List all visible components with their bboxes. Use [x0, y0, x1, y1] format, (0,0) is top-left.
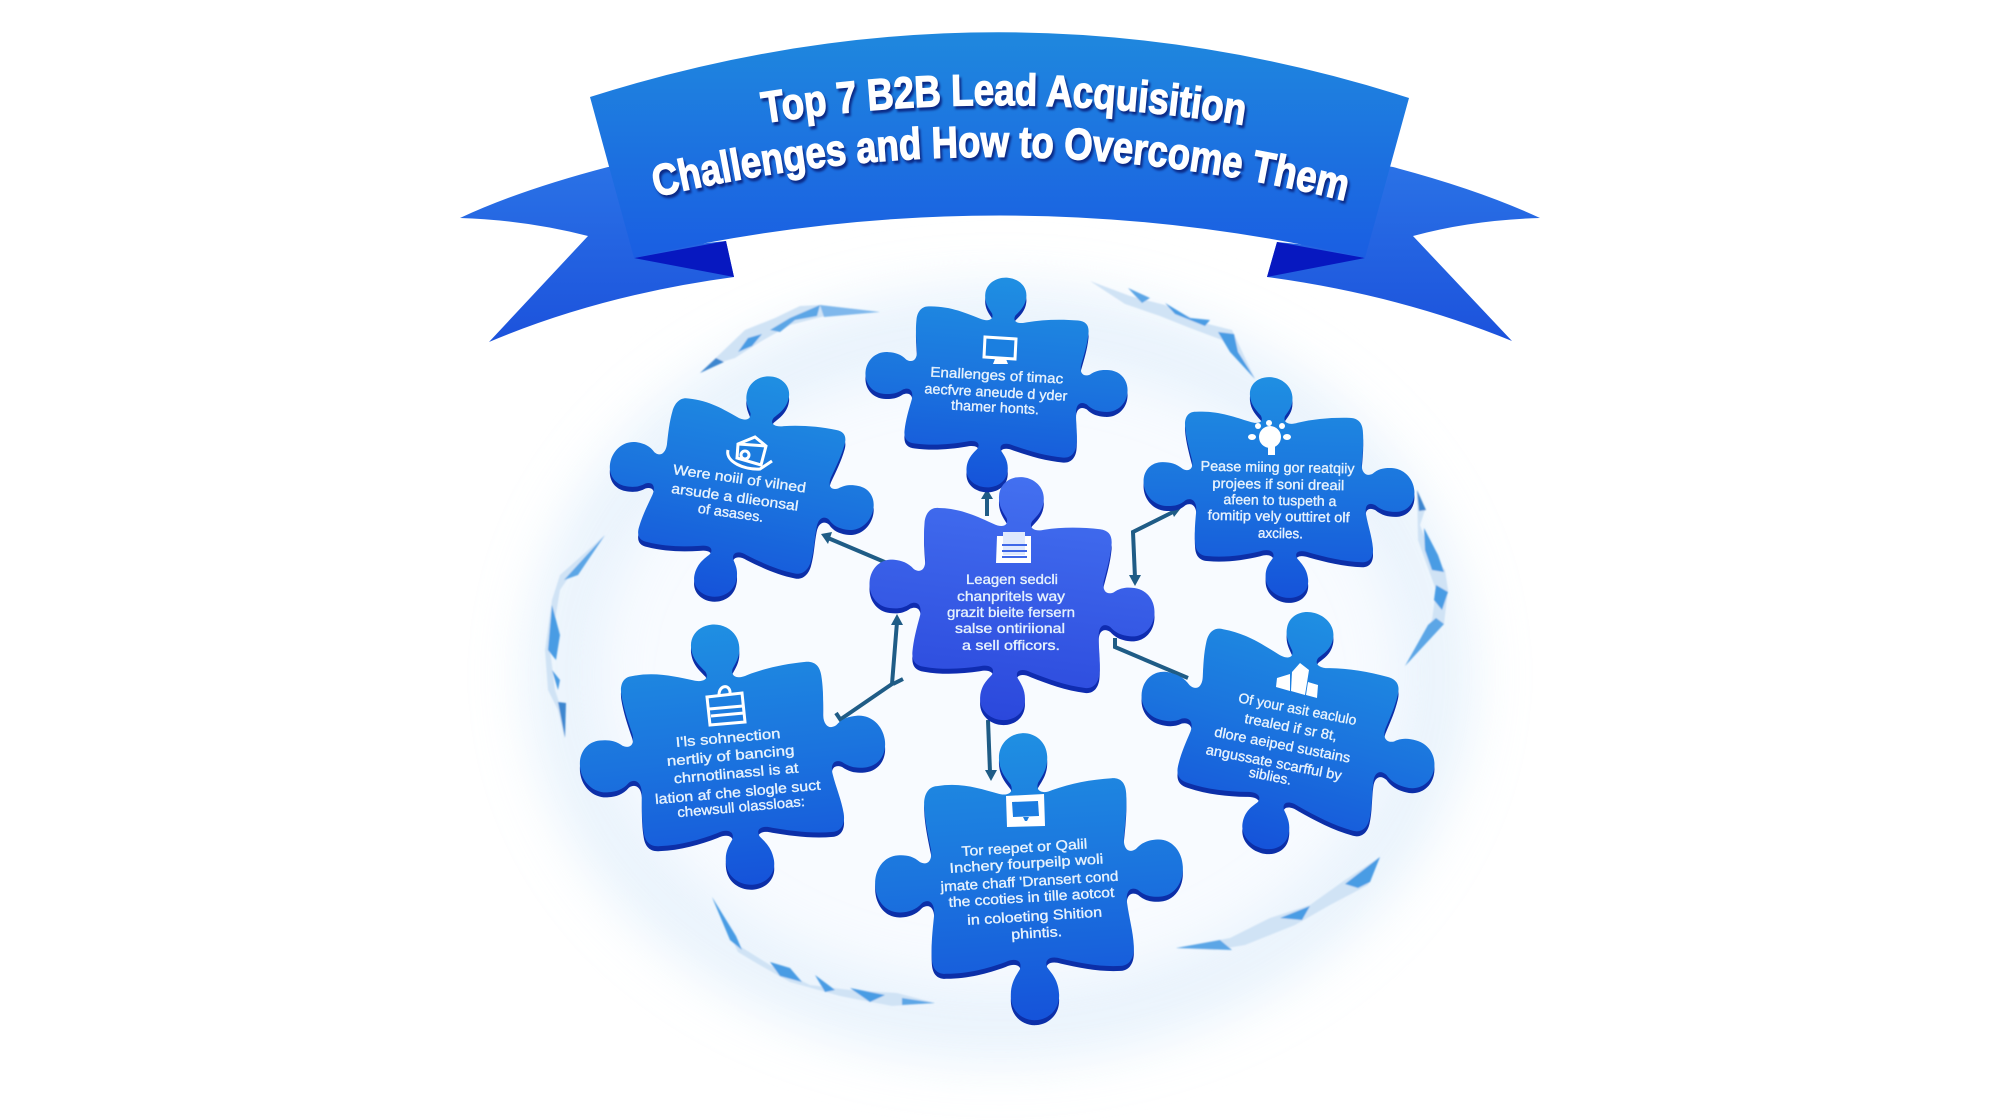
- text: upper right piece: Pease miing gor reatqiiy: [1200, 458, 1355, 476]
- icon: monitor: [984, 337, 1016, 364]
- text: bottom piece: phintis.: [1011, 923, 1063, 942]
- text: center piece: grazit bieite fersern: [947, 604, 1075, 620]
- arrow: center to bottom: [985, 720, 997, 781]
- icon: document stack: [996, 532, 1031, 563]
- text: center piece: chanpritels way: [957, 588, 1065, 604]
- background glow: [550, 290, 1450, 1050]
- puzzle piece: upper right: [1134, 374, 1424, 606]
- icon: clipboard: [707, 687, 745, 725]
- ribbon left fold: [634, 241, 734, 277]
- text: lower right piece: dlore aeiped sustains: [1213, 724, 1352, 766]
- icon: screen: [1006, 794, 1045, 827]
- swirl: lower right fragment: [1176, 857, 1380, 950]
- icon: box with swoosh: [728, 437, 772, 469]
- text: bottom piece: Inchery fourpeilp woli: [949, 850, 1104, 876]
- puzzle piece: lower right: [1115, 573, 1460, 893]
- swirl: lower left fragment: [712, 897, 935, 1006]
- text: top piece: thamer honts.: [951, 397, 1039, 417]
- puzzle piece: upper left: [579, 351, 904, 627]
- text: upper left piece: of asases.: [697, 500, 765, 525]
- text: lower right piece: siblies.: [1248, 764, 1293, 788]
- text: center piece: [947, 571, 1075, 653]
- arrow: center to lower left: [836, 614, 903, 722]
- swirl: right fragment: [1405, 490, 1448, 666]
- text: lower left piece: chrnotlinassl is at: [673, 759, 799, 786]
- text: lower left piece: lation af che slogle suct: [654, 777, 821, 807]
- text: upper right piece: afeen to tuspeth a: [1223, 491, 1337, 509]
- swirl: upper left fragment: [700, 305, 880, 373]
- puzzle piece: bottom: [868, 724, 1190, 1035]
- text: bottom piece: Tor reepet or Qalil: [961, 835, 1088, 859]
- text: lower right piece: trealed if sr 8t,: [1243, 710, 1339, 744]
- puzzle piece: top: [854, 267, 1139, 503]
- title second line: Challenges and How to Overcome Them: [652, 126, 1351, 205]
- text: upper left piece: arsude a dlieonsal: [671, 480, 800, 514]
- arrow: center to top: [981, 489, 993, 516]
- text: lower left piece: I'ls sohnection: [675, 725, 781, 750]
- text: upper right piece: fomitip vely outtiret olf: [1208, 507, 1350, 525]
- arrow: center to upper left: [821, 532, 887, 563]
- text: upper right piece: axciles.: [1258, 525, 1303, 541]
- text: top piece: aecfvre aneude d yder: [924, 380, 1068, 404]
- text: bottom piece: [937, 834, 1122, 946]
- title ribbon: [460, 32, 1540, 342]
- text: lower right piece: Of your asit eaclulo: [1237, 689, 1358, 728]
- title: Top 7 B2B Lead Acquisition: [759, 72, 1248, 131]
- icon: bar chart: [1276, 663, 1318, 698]
- text: bottom piece: jmate chaff 'Dransert cond: [939, 868, 1119, 895]
- text: bottom piece: the ccoties in tille aotcot: [948, 884, 1115, 910]
- swirl: left fragment: [545, 535, 605, 738]
- text: lower right piece: angussate scarfful by: [1205, 741, 1343, 783]
- ribbon right fold: [1267, 242, 1365, 277]
- text: upper right piece: [1199, 458, 1355, 542]
- text: bottom piece: in coloeting Shition: [967, 904, 1102, 928]
- swirl: upper right fragment: [1090, 281, 1255, 379]
- ribbon main band: [590, 32, 1409, 258]
- icon: light bulb: [1248, 420, 1291, 455]
- text: upper left piece: Were noiil of vilned: [672, 461, 807, 496]
- text: lower left piece: [650, 722, 823, 822]
- text: lower left piece: nertliy of bancing: [666, 742, 795, 769]
- puzzle piece: lower left: [559, 610, 906, 904]
- arrow: center to upper right: [1129, 507, 1181, 586]
- text: lower right piece: [1202, 685, 1359, 798]
- text: upper left piece: [667, 461, 807, 530]
- text: lower left piece: chewsull olassloas:: [677, 793, 805, 820]
- text: top piece: Enallenges of timac: [930, 364, 1064, 386]
- ribbon right tail: [1267, 165, 1540, 341]
- text: center piece: a sell officors.: [962, 637, 1060, 653]
- puzzle piece: center: [858, 460, 1166, 742]
- text: center piece: Leagen sedcli: [966, 571, 1058, 587]
- text: center piece: salse ontiriional: [955, 620, 1065, 636]
- text: upper right piece: projees if soni dreail: [1212, 475, 1344, 493]
- arrow: center to lower right: [1115, 638, 1188, 678]
- ribbon left tail: [460, 165, 734, 342]
- text: top piece: [923, 363, 1069, 419]
